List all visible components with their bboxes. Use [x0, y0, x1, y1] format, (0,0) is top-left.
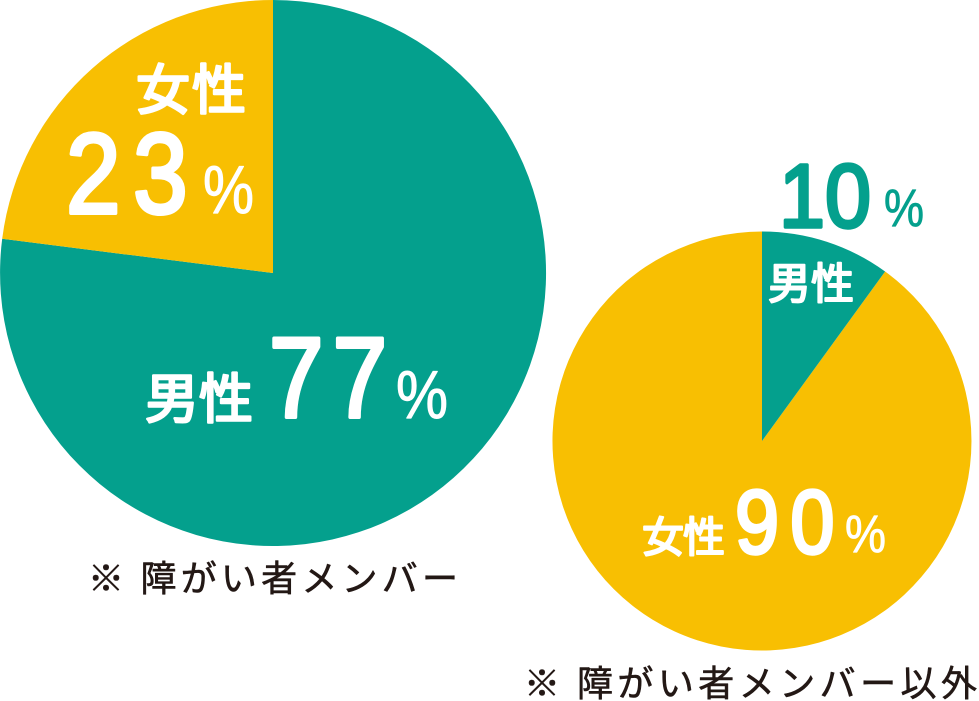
label: 10% outside: 10 — [779, 147, 871, 247]
pie chart: non-disabled members — [552, 232, 971, 650]
label: male 77%: % — [396, 357, 448, 433]
pie chart: disabled members — [0, 0, 546, 546]
slice: male 77% — [0, 0, 546, 546]
caption: disabled members: ※ 障がい者メンバー — [88, 550, 458, 602]
label: female 90%: 女性 — [642, 504, 725, 565]
label: 10% outside — [779, 147, 924, 247]
label: male 77%: 77 — [269, 314, 387, 442]
label: male 77%: 男性 — [145, 355, 253, 434]
label: female 90% — [642, 471, 886, 572]
slice: male 10% — [762, 232, 885, 441]
label: female 23%: % — [203, 152, 254, 228]
label: female 23% — [66, 46, 254, 238]
label: male 77% — [145, 314, 448, 442]
label: male: 男性 — [768, 250, 854, 312]
label: female 90%: % — [845, 505, 886, 564]
label: 10% outside: % — [884, 179, 924, 238]
label: female 23%: 女性 — [136, 46, 246, 125]
label: female 23%: 23 — [66, 110, 188, 238]
slice: female 90% — [552, 232, 971, 650]
slice: female 23% — [2, 0, 273, 273]
label: female 90%: 90 — [735, 471, 834, 572]
